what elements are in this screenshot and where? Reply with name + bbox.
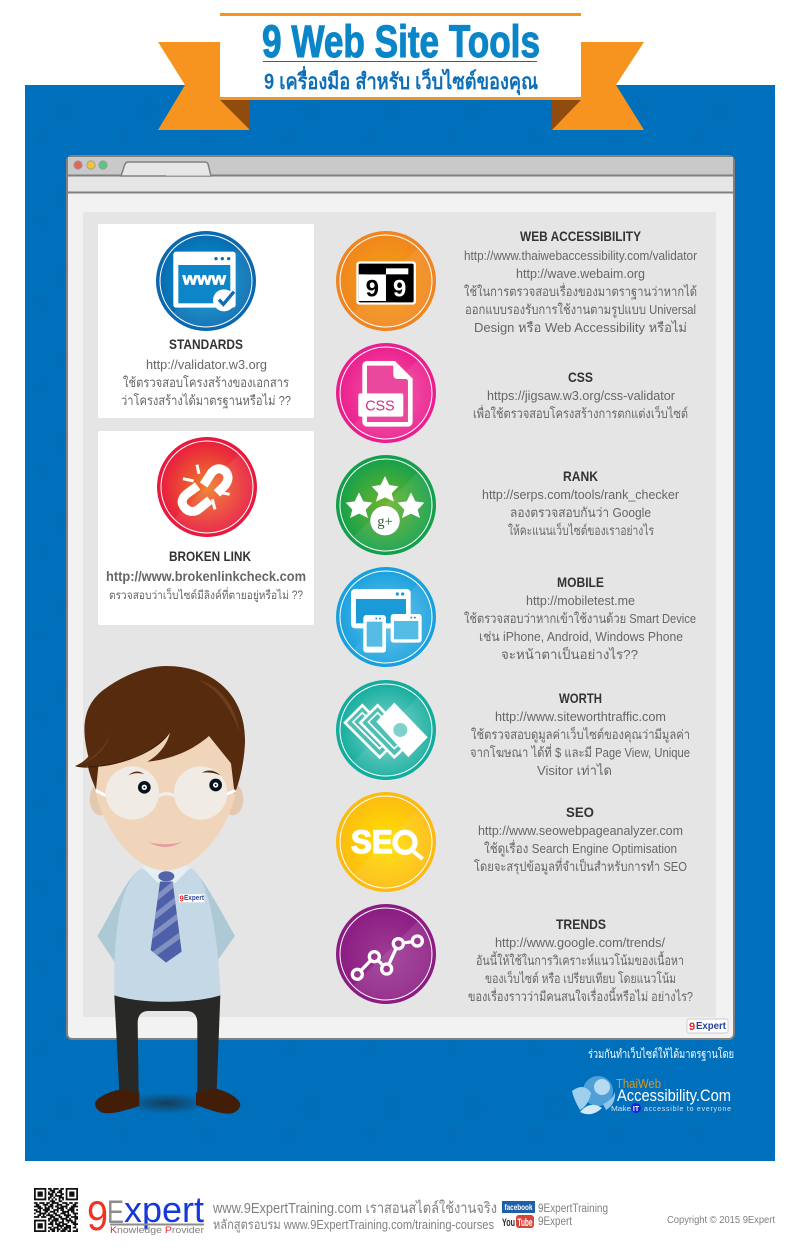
character shadow <box>125 1093 208 1114</box>
mobile text: จะหน้าตาเป็นอย่างไร?? <box>501 645 638 662</box>
icon: 9 9 contrast: 9 <box>366 275 379 302</box>
trends text: ของเว็บไซต์ หรือ เปรียบเทียบ โดยแนวโน้ม <box>485 969 676 986</box>
icon: seo magnifier: SE <box>351 824 393 860</box>
css text: https://jigsaw.w3.org/css-validator <box>487 388 676 403</box>
9expert logo: E <box>107 1194 124 1230</box>
mobile heading: MOBILE <box>557 574 604 590</box>
worth text: จากโฆษณา ได้ที่ $ และมี Page View, Unique <box>470 744 690 760</box>
trends text: อันนี้ให้ใช้ในการวิเคราะห์แนวโน้มของเนื้อหา <box>476 951 684 968</box>
worth text: ใช้ตรวจสอบดูมูลค่าเว็บไซต์ของคุณว่ามีมูลค่า <box>471 725 690 743</box>
web accessibility text: ใช้ในการตรวจสอบเรื่องของมาตราฐานว่าหากได้ <box>464 283 697 300</box>
thai web accessibility logo: ThaiWeb <box>616 1076 661 1091</box>
ribbon right fold <box>552 100 581 130</box>
character trousers <box>114 995 220 1093</box>
character glasses <box>96 766 236 820</box>
rank heading: RANK <box>563 468 598 484</box>
character shirt <box>114 868 221 1002</box>
mobile text: http://mobiletest.me <box>526 593 635 608</box>
seo text: http://www.seowebpageanalyzer.com <box>478 823 683 838</box>
credit caption: ร่วมกันทำเว็บไซต์ให้ได้มาตรฐานโดย <box>588 1046 734 1061</box>
character shirt badge: 9 <box>179 894 184 903</box>
ribbon right tail <box>552 42 644 130</box>
youtube link <box>502 1215 573 1229</box>
tool: web accessibility <box>336 228 698 335</box>
web accessibility text: ออกแบบรองรับการใช้งานตามรูปแบบ Universal <box>465 302 696 318</box>
qr code <box>34 1188 78 1232</box>
9expert badge on window: Expert <box>696 1021 727 1032</box>
ribbon left tail <box>158 42 249 130</box>
ribbon left fold <box>220 100 250 130</box>
footer website text: www.9ExpertTraining.com เราสอนสไตล์ใช้งานจริง <box>212 1199 497 1217</box>
thai web accessibility logo <box>572 1076 731 1114</box>
rank text: http://serps.com/tools/rank_checker <box>482 487 680 502</box>
youtube link: 9Expert <box>538 1216 573 1228</box>
icon: 9 9 contrast <box>336 231 436 331</box>
copyright: Copyright © 2015 9Expert <box>667 1215 775 1226</box>
character eyes <box>128 771 222 794</box>
icon: css file: CSS <box>365 398 395 414</box>
web accessibility text: Design หรือ Web Accessibility หรือไม่ <box>474 320 687 335</box>
rank text: ลองตรวจสอบกันว่า Google <box>510 505 651 520</box>
9expert logo <box>87 1189 204 1239</box>
tool: rank <box>336 455 680 555</box>
worth text: Visitor เท่าได <box>537 763 612 778</box>
rank text: ให้คะแนนเว็บไซต์ของเราอย่างไร <box>508 521 654 538</box>
trends text: http://www.google.com/trends/ <box>495 935 665 950</box>
thai web accessibility logo: Accessibility.Com <box>617 1087 731 1105</box>
tool: worth <box>336 680 690 780</box>
thai web accessibility logo: accessible to everyone <box>644 1106 731 1113</box>
trends text: ของเรื่องราวว่ามีคนสนใจเรื่องนี้หรือไม่ อย่างไร? <box>468 987 693 1004</box>
css text: เพื่อใช้ตรวจสอบโครงสร้างการตกแต่งเว็บไซต์ <box>473 404 688 421</box>
youtube link: You <box>502 1217 515 1229</box>
character shirt badge <box>179 894 205 903</box>
broken link url: http://www.brokenlinkcheck.com <box>106 569 306 584</box>
title ribbon <box>158 13 644 130</box>
broken link description: ตรวจสอบว่าเว็บไซต์มีลิงค์ที่ตายอยู่หรือไม่ ?? <box>109 587 303 602</box>
9expert logo: xpert <box>124 1189 204 1230</box>
standards description <box>121 375 291 409</box>
css text <box>473 388 688 421</box>
browser tab <box>121 162 211 176</box>
ribbon banner <box>220 13 581 100</box>
mobile text: ใช้ตรวจสอบว่าหากเข้าใช้งานด้วย Smart Device <box>464 611 696 626</box>
css heading: CSS <box>568 369 593 385</box>
icon: line trend <box>336 904 436 1004</box>
thai web accessibility logo: Make <box>611 1106 631 1113</box>
card: standards <box>98 224 314 418</box>
footer website text <box>212 1199 497 1233</box>
icon: stars and g+ <box>336 455 436 555</box>
facebook link: facebook <box>504 1203 533 1212</box>
standards description: ใช้ตรวจสอบโครงสร้างของเอกสาร <box>123 375 289 390</box>
accessibility credit <box>572 1046 734 1114</box>
character shoes <box>95 1089 240 1114</box>
seo heading: SEO <box>566 804 594 820</box>
facebook link <box>502 1201 608 1215</box>
footer <box>34 1188 775 1239</box>
web accessibility text: http://wave.webaim.org <box>516 266 645 281</box>
tool: trends <box>336 904 693 1004</box>
character: man with glasses <box>75 666 245 1114</box>
icon: broken chain link <box>157 437 257 537</box>
worth text <box>470 709 690 778</box>
trends heading: TRENDS <box>556 916 606 932</box>
broken link heading: BROKEN LINK <box>169 548 251 564</box>
worth heading: WORTH <box>559 690 602 706</box>
9expert badge on window: 9 <box>689 1021 695 1033</box>
standards description: ว่าโครงสร้างได้มาตรฐานหรือไม่ ?? <box>121 393 291 409</box>
trends text <box>468 935 693 1004</box>
icon: responsive devices <box>336 567 436 667</box>
browser window <box>67 156 734 1039</box>
card: broken link <box>98 431 314 625</box>
rank text <box>482 487 680 538</box>
thai web accessibility logo: IT <box>633 1106 640 1113</box>
icon: www window with check: www <box>182 269 226 288</box>
subtitle text: 9 เครื่องมือ สำหรับ เว็บไซต์ของคุณ <box>264 65 538 96</box>
window traffic lights <box>74 161 107 169</box>
icon: stars and g+: g+ <box>377 514 393 530</box>
icon: css file <box>336 343 436 443</box>
character ears <box>90 783 243 815</box>
inner content panel <box>83 212 716 1017</box>
9expert logo: 9 <box>87 1192 108 1239</box>
icon: banknotes <box>336 680 436 780</box>
standards heading: STANDARDS <box>169 336 243 352</box>
seo text: ใช้ดูเรื่อง Search Engine Optimisation <box>484 840 677 857</box>
tool: mobile <box>336 567 696 667</box>
web accessibility heading: WEB ACCESSIBILITY <box>520 228 642 244</box>
standards url: http://validator.w3.org <box>146 357 267 372</box>
seo text: โดยจะสรุปข้อมูลที่จำเป็นสำหรับการทำ SEO <box>474 857 687 875</box>
9expert badge on window <box>687 1019 728 1033</box>
seo text <box>474 823 687 875</box>
mobile text <box>464 593 696 662</box>
web accessibility text <box>464 248 698 335</box>
character shirt badge: Expert <box>184 895 205 902</box>
9expert logo: Knowledge Provider <box>110 1225 204 1236</box>
tool: css <box>336 343 688 443</box>
character arms <box>97 868 235 963</box>
character hair <box>75 666 245 794</box>
web accessibility text: http://www.thaiwebaccessibility.com/validator <box>464 248 698 263</box>
worth text: http://www.siteworthtraffic.com <box>495 709 666 724</box>
icon: 9 9 contrast: 9 <box>393 275 406 302</box>
character collar <box>142 863 191 883</box>
icon: www window with check <box>156 231 256 331</box>
youtube link: Tube <box>518 1217 532 1229</box>
title text: 9 Web Site Tools <box>262 16 540 67</box>
icon: seo magnifier <box>336 792 436 892</box>
tool: seo <box>336 792 687 892</box>
character tie <box>150 871 182 962</box>
footer website text: หลักสูตรอบรม www.9ExpertTraining.com/training-courses <box>213 1217 494 1233</box>
facebook link: 9ExpertTraining <box>538 1203 608 1215</box>
mobile text: เช่น iPhone, Android, Windows Phone <box>479 629 683 644</box>
character face <box>95 717 237 871</box>
character mouth <box>148 842 182 847</box>
